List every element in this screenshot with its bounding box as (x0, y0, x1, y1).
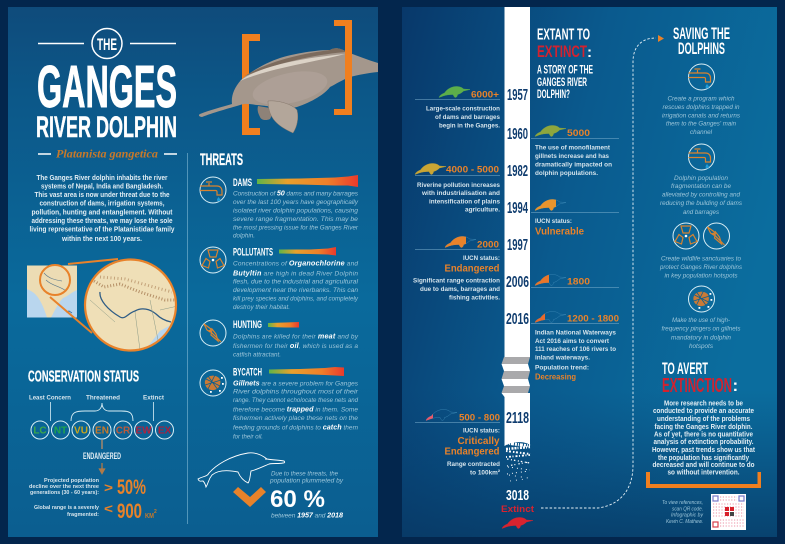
stat: global range: < (104, 501, 113, 516)
action: control dams: and barrages (683, 209, 720, 216)
threat: bycatch: for their oil. (233, 434, 263, 440)
event: 2016: 1200 - 1800 (567, 314, 619, 324)
event: 2006 (531, 274, 619, 288)
icon: turtle in net (688, 286, 714, 312)
threat: bycatch: BYCATCH (233, 366, 262, 378)
action: control dams (660, 144, 743, 216)
callout: population decline 60%: 60 % (270, 486, 325, 513)
heading: to avert extinction: : (732, 376, 738, 395)
action: pingers on gillnets: mandatory in dolphin (671, 334, 731, 342)
event: 1957: of dams and barrages (435, 114, 500, 121)
stat: population decline: 50% (117, 476, 146, 499)
heading: saving the dolphins: SAVING THE (673, 24, 730, 43)
arrow: dashed from extinct to saving the dolphins (541, 35, 664, 508)
threat: bycatch: River dolphins throughout most of their (233, 388, 359, 396)
stat: global range: 2 (154, 509, 157, 515)
action: rescue program: channel (690, 129, 713, 136)
heading: to avert extinction: EXTINCTION (662, 375, 732, 397)
event: 1957 (415, 86, 500, 130)
event: 2016: Indian National Waterways (535, 330, 616, 336)
event: 1997: IUCN status: (463, 255, 500, 262)
text: call for research: analysis of extinction probability. (654, 439, 754, 446)
QR code (711, 494, 746, 530)
event: 1982: 4000 - 5000 (446, 164, 499, 174)
conservation status scale: CR (116, 426, 131, 436)
icon: spear (704, 223, 730, 249)
heading: conservation status: CONSERVATION STATUS (28, 368, 139, 386)
action: rescue program: them to the Ganges' main (666, 120, 736, 128)
event: 1982: intensification of plains (429, 198, 500, 206)
action: pingers on gillnets: frequency pingers on gillnets (662, 326, 741, 332)
text: call for research: As of yet, there is no quantitative (654, 432, 753, 438)
intro text: systems of Nepal, India and Bangladesh. (41, 184, 163, 190)
threat: pollutants: development near the riverbanks. This can (233, 287, 358, 294)
credits: Kevin C. Mathew. (666, 519, 703, 525)
threat: dams: DAMS (233, 177, 252, 189)
stat: population decline: generations (30 - 60 years): (30, 490, 99, 496)
event: 1957: Large-scale construction (426, 106, 500, 112)
timeline years: 1997 (507, 237, 528, 254)
credits: scan QR code. (672, 506, 703, 512)
subtitle: scientific name: Platanista gangetica (56, 146, 158, 160)
action: pingers on gillnets: Make the use of high- (672, 317, 731, 324)
event: 2118: Range contracted (447, 461, 500, 468)
event: 2118 (415, 410, 501, 476)
text: call for research (652, 400, 756, 476)
photo: Ganges river dolphin in brackets (199, 20, 378, 135)
heading: saving the dolphins: DOLPHINS (678, 39, 725, 58)
threat: pollutants: POLLUTANTS (233, 246, 273, 258)
event: 1982 (415, 164, 500, 214)
intro text: construction of dams, irrigation systems, (40, 200, 165, 208)
event: 1994: Vulnerable (535, 226, 584, 238)
timeline bar (502, 7, 530, 481)
icon: radiation (200, 247, 226, 273)
threat: dams: isolated river dolphin populations, causing (233, 208, 358, 214)
map: dolphin range (27, 259, 180, 352)
stat: global range: fragmented: (67, 512, 99, 518)
event: 1960: dolphin populations. (535, 170, 598, 177)
threat: pollutants: Concentrations of Organochlorine and (233, 258, 358, 268)
stat: population decline: > (104, 480, 113, 495)
heading: extant to extinct: A STORY OF THE (537, 64, 593, 76)
threat: hunting: Dolphins are killed for their meat and by (233, 332, 359, 340)
title (36, 28, 177, 144)
text: call for research: so without intervention. (668, 470, 740, 476)
event: 2016 (531, 312, 619, 382)
timeline years (506, 87, 529, 427)
event: 1997: 2000 (477, 240, 499, 250)
action: wildlife sanctuaries (659, 223, 743, 280)
callout: population decline 60%: population plummeted by (269, 478, 344, 484)
conservation status scale: LC (33, 426, 47, 436)
event: 2016: Decreasing (535, 372, 576, 382)
stat: population decline: decline over the next three (29, 484, 100, 490)
icon: tap (200, 177, 226, 203)
conservation status scale: EN (95, 426, 109, 436)
conservation status scale (29, 394, 174, 474)
icon: spear (200, 320, 226, 346)
text: call for research: understanding of the problems (657, 416, 750, 423)
threat: pollutants: Butyltin are high in dead River Dolphin (233, 268, 358, 278)
threat: bycatch: fishermen actively place these nets on the (233, 415, 358, 422)
conservation status scale: EW (135, 426, 152, 436)
event: 1982: Riverine pollution increases (417, 182, 500, 189)
callout: population decline 60% (233, 470, 344, 520)
timeline years: 1957 (507, 87, 528, 104)
text: call for research: decreased and will continue to do (652, 462, 754, 469)
threat: dams (200, 175, 359, 240)
heading: extant to extinct (537, 26, 593, 101)
event: 2118: 500 - 800 (459, 412, 500, 422)
threat: bycatch: Gillnets are a severe problem for Ganges (233, 378, 359, 388)
event: 2016: inland waterways. (535, 354, 590, 362)
threat: dams: over the last 100 years have geographically (233, 199, 359, 206)
event: 1994 (531, 200, 619, 238)
event: 1997 (413, 236, 500, 302)
event: 1960: The use of monofilament (535, 144, 611, 152)
callout: population decline 60%: between 1957 and 2018 (271, 510, 343, 520)
orange bracket (646, 472, 761, 488)
threat: pollutants (200, 246, 359, 311)
icon: radiation (673, 223, 699, 249)
intro text: living representative of the Platanistidae family (30, 226, 175, 234)
panel: left page (8, 7, 378, 537)
threat: bycatch: feeding grounds of dolphins to catch them (233, 422, 359, 432)
timeline years: 2118 (506, 410, 529, 427)
event: 1957: begin in the Ganges. (439, 122, 500, 130)
threat: hunting: fishermen for their oil, which is used as a (233, 341, 358, 350)
heading: to avert extinction (662, 359, 738, 397)
conservation status scale: VU (74, 426, 88, 436)
threat: dams: dolphin. (233, 232, 255, 240)
text: call for research: However, past trends show us that (652, 447, 756, 454)
icon: tap (688, 144, 714, 170)
action: control dams: alleviated by controlling and (662, 192, 740, 198)
stat: global range: 900 (117, 500, 142, 523)
event: 1960: 5000 (567, 128, 590, 138)
timeline years: 1994 (507, 200, 528, 217)
action: pingers on gillnets (662, 286, 741, 350)
stat: global range (34, 500, 157, 523)
action: rescue program (662, 64, 741, 136)
event: 2016: Population trend: (535, 364, 589, 372)
conservation status scale: ENDANGERED (83, 451, 121, 461)
threat: bycatch (200, 366, 359, 440)
event: 1982: agriculture. (465, 206, 500, 214)
credits: To view references, (662, 500, 703, 506)
heading: to avert extinction: TO AVERT (662, 359, 708, 378)
threat: dams: Construction of 50 dams and many barrages (233, 188, 359, 198)
action: control dams: fragmentation can be (671, 183, 731, 190)
conservation status scale: Threatened (86, 394, 120, 402)
event: 2118: to 100km² (470, 470, 501, 476)
heading: extant to extinct: EXTINCT (537, 42, 587, 61)
text: call for research: conducted to provide an accurate (653, 408, 754, 415)
conservation status scale: EX (158, 426, 171, 436)
title: RIVER DOLPHIN (36, 111, 177, 144)
action: rescue program: irrigation canals and returns (662, 112, 741, 120)
action: rescue program: Create a program which (668, 96, 735, 102)
event: 1997: Significant range contraction (413, 278, 500, 284)
heading: saving the dolphins (673, 24, 730, 58)
heading: extant to extinct: DOLPHIN? (537, 89, 570, 101)
threat: bycatch: range. They cannot echolocate these nets and (233, 397, 358, 404)
icon: down chevron (233, 487, 266, 507)
panel: right page (402, 7, 777, 537)
callout: population decline 60%: Due to these threats, the (271, 470, 338, 478)
intro text: This vast area is now under threat due to the (34, 192, 170, 199)
intro text (30, 175, 175, 243)
event: 2118: IUCN status: (463, 428, 500, 434)
intro text: addressing these threats, we may lose the sole (32, 218, 173, 225)
threat: hunting: HUNTING (233, 319, 262, 331)
heading: extant to extinct: EXTANT TO (537, 26, 590, 44)
threat: pollutants: flesh, due to the industrial and agricultural (233, 278, 359, 286)
timeline years: 2006 (506, 274, 529, 291)
timeline years: 1982 (507, 163, 528, 180)
event: 1997: Endangered (444, 262, 500, 274)
action: rescue program: rescues dolphins trapped in (662, 104, 740, 111)
event: 2016: 111 reaches of 106 rivers to (535, 346, 616, 353)
icon: dolphin outline (198, 453, 285, 487)
event: 1957: 6000+ (471, 90, 499, 100)
title: THE (97, 35, 117, 54)
heading: extant to extinct: : (587, 44, 592, 61)
conservation status scale: NT (54, 426, 67, 436)
action: wildlife sanctuaries: Create wildlife sanctuaries to (661, 256, 741, 262)
intro text: The Ganges River dolphin inhabits the river (36, 175, 168, 182)
event: 1982: with industrialisation and (421, 190, 500, 197)
event: 1960: dramatically impacted on (535, 162, 612, 168)
action: pingers on gillnets: hotspots (689, 343, 714, 350)
text: call for research: More research needs to be (664, 400, 743, 408)
heading: threats: THREATS (200, 150, 243, 169)
title: GANGES (37, 54, 177, 120)
threat: hunting (200, 319, 359, 358)
timeline years: 2016 (506, 311, 529, 328)
stat: global range: KM (145, 513, 154, 520)
conservation status scale: Extinct (143, 394, 165, 402)
text: call for research: the population has significantly (658, 455, 749, 462)
event: 2006: 1800 (567, 276, 590, 286)
event: 1960 (531, 126, 619, 177)
text: call for research: facing the Ganges River dolphin. (654, 424, 753, 431)
threat: pollutants: kill prey species and dolphins, and completely (233, 296, 359, 302)
threat: bycatch: therefore become trapped in them. Some (233, 404, 358, 414)
event: 2016: Act 2016 aims to convert (535, 338, 610, 345)
action: control dams: Dolphin population (674, 175, 728, 182)
action: wildlife sanctuaries: protect Ganges River dolphins (659, 264, 743, 271)
timeline years: 1960 (507, 126, 528, 143)
intro text: within the next 100 years. (61, 236, 142, 243)
timeline end: extinct 3018: 3018 (506, 487, 529, 504)
timeline end: extinct 3018 (501, 487, 535, 528)
credits (662, 500, 703, 525)
event: 2118: Critically (458, 435, 500, 447)
event: 2118: Endangered (444, 446, 500, 458)
heading: extant to extinct: GANGES RIVER (537, 77, 587, 89)
icon: turtle in net (200, 370, 226, 396)
icon: tap (688, 64, 714, 90)
threat: dams: severe range fragmentation. This may be (233, 216, 358, 223)
event: 1997: due to dams, barrages and (420, 286, 500, 293)
action: wildlife sanctuaries: in key population hotspots (664, 272, 738, 280)
stat: population decline (29, 476, 146, 499)
threat: hunting: catfish attractant. (233, 352, 281, 358)
event: 1997: fishing activities. (449, 294, 500, 302)
credits: Infographic by (671, 512, 703, 518)
event: 1960: gillnets increase and has (535, 153, 609, 160)
threat: pollutants: destroy their habitat. (233, 304, 290, 311)
conservation status scale: Least Concern (29, 394, 71, 402)
stat: population decline: Projected population (44, 478, 99, 484)
timeline end: extinct 3018: Extinct (501, 504, 535, 515)
action: control dams: reducing the building of dams (660, 200, 743, 207)
intro text: pollution, hunting and entanglement. Without (32, 210, 173, 216)
event: 1994: IUCN status: (535, 218, 572, 225)
stat: global range: Global range is a severely (34, 505, 100, 511)
threat: dams: the most pressing issue for the Ganges River (233, 224, 359, 232)
